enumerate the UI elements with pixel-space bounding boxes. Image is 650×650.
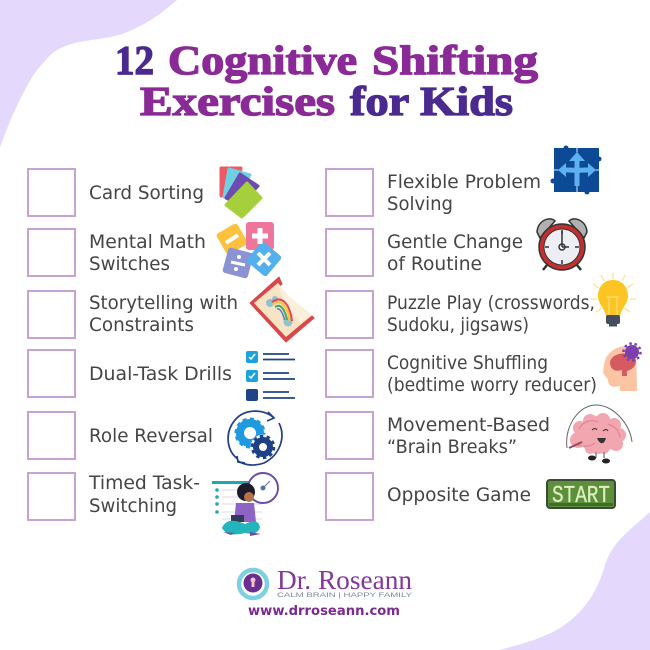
list text: right column: “Brain Breaks”	[387, 436, 517, 458]
checkboxes: left column	[28, 169, 75, 520]
logo	[239, 565, 413, 619]
list text: right column: Puzzle Play (crosswords,	[387, 292, 595, 314]
checkboxes: right column	[326, 169, 373, 520]
title: 12	[115, 37, 154, 83]
icon: storybook with rainbow	[250, 277, 314, 342]
logo tagline: CALM BRAIN | HAPPY FAMILY	[277, 593, 412, 599]
icon: light bulb	[591, 273, 636, 326]
background blob: bottom right	[500, 512, 650, 650]
logo wordmark: Dr. Roseann	[277, 565, 413, 595]
icon: head with brain and gear	[603, 344, 640, 391]
list text: right column: Gentle Change	[387, 231, 523, 253]
list text: left column: Mental Math	[89, 231, 206, 253]
list text: right column: (bedtime worry reducer)	[387, 374, 597, 396]
list text: right column: Flexible Problem	[387, 171, 541, 193]
list text: left column: Storytelling with	[89, 292, 238, 314]
icon: person with clock	[212, 473, 278, 536]
list text: left column	[88, 182, 238, 517]
background blob: top left	[0, 0, 177, 147]
list text: left column: Role Reversal	[89, 425, 213, 447]
icon: checklist	[246, 351, 295, 401]
title: Exercises	[140, 78, 335, 124]
title: Shifting	[372, 37, 539, 83]
list text: right column: Sudoku, jigsaws)	[387, 314, 529, 336]
website: www.drroseann.com	[248, 603, 400, 619]
list text: right column	[387, 171, 597, 506]
list text: right column: Movement-Based	[387, 414, 550, 436]
list text: left column: Card Sorting	[89, 182, 204, 204]
icon: cards	[221, 168, 261, 217]
title: Cognitive	[168, 37, 357, 83]
list text: right column: of Routine	[387, 253, 482, 275]
list text: right column: Opposite Game	[387, 484, 531, 506]
list text: left column: Timed Task-	[88, 472, 200, 494]
list text: right column: Cognitive Shuffling	[387, 352, 548, 374]
title	[115, 37, 539, 124]
list text: left column: Constraints	[89, 314, 194, 336]
icon: gears with cycle arrows	[228, 411, 282, 465]
list text: right column: Solving	[387, 193, 453, 215]
list text: left column: Switches	[89, 253, 170, 275]
logo mark	[239, 570, 267, 598]
icon: puzzle with arrows	[550, 146, 602, 194]
icon: brain with jump rope	[567, 405, 632, 464]
icon: alarm clock	[537, 219, 587, 270]
icon: pixel start button: START	[552, 483, 610, 510]
list text: left column: Dual-Task Drills	[89, 363, 232, 385]
icon: math symbols	[216, 222, 282, 279]
title: for Kids	[350, 78, 513, 124]
list text: left column: Switching	[89, 495, 177, 517]
